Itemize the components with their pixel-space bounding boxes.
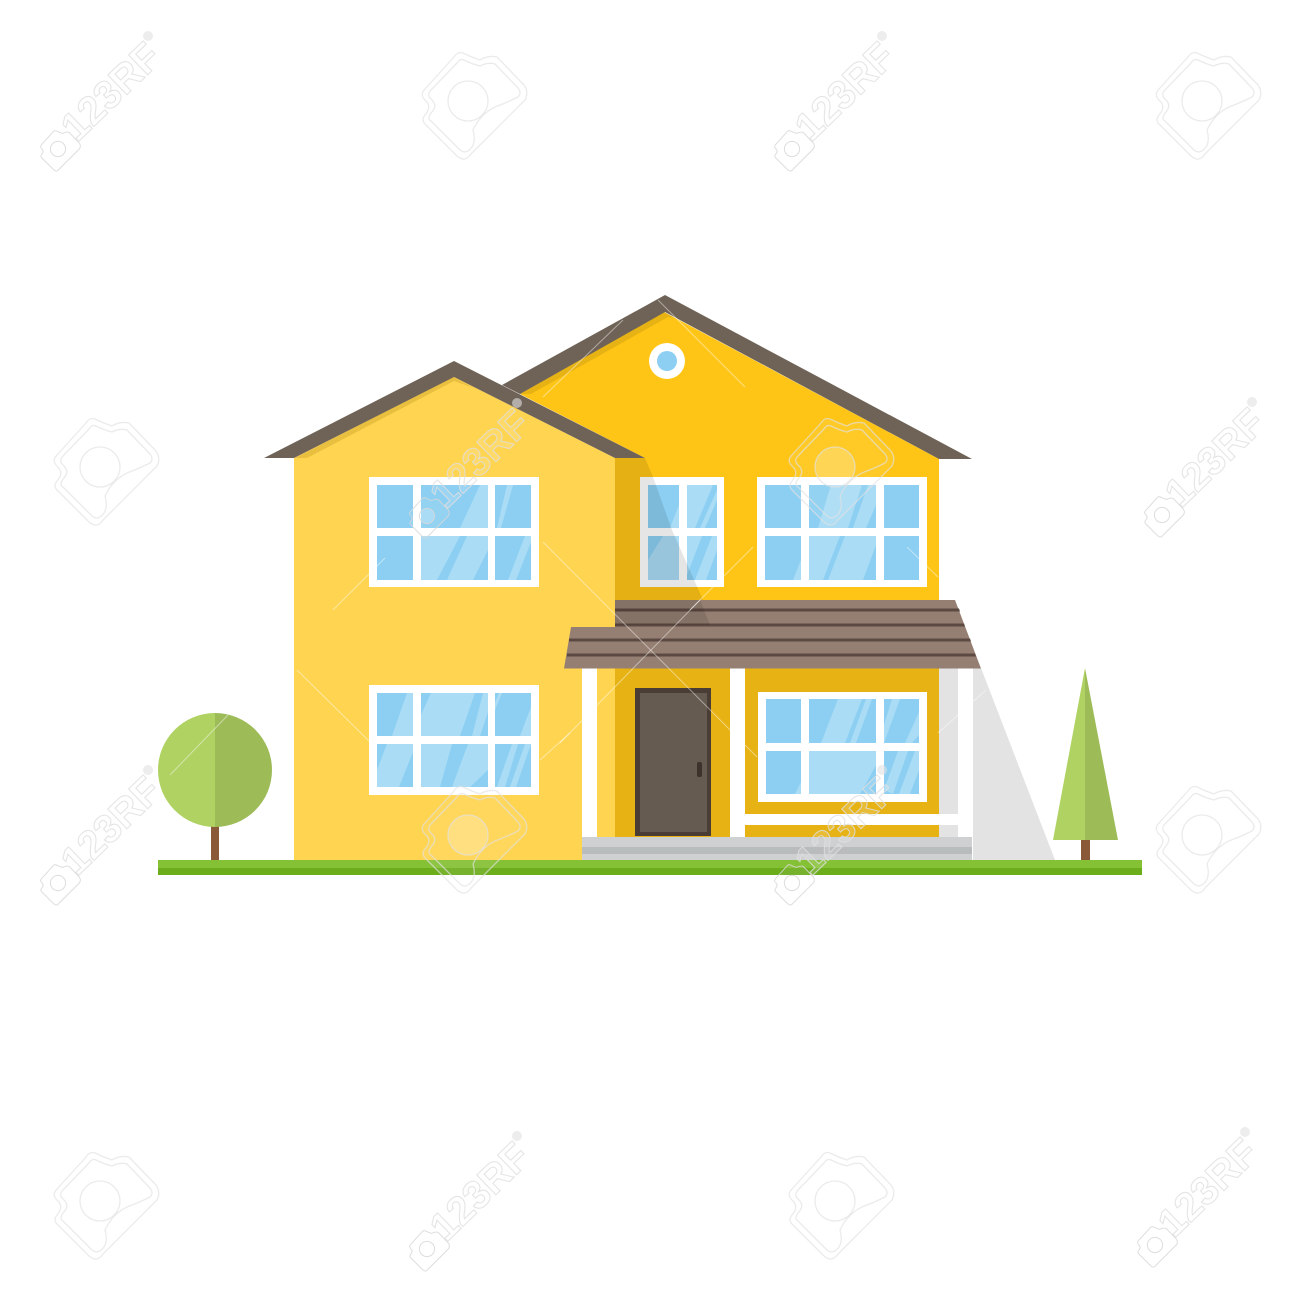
porch columns and railing [582,668,973,837]
ground shadow of the house [973,668,1055,860]
left gable roof [264,361,645,458]
watermark stamp 7: 123RF [422,1134,539,1249]
watermark stamp 5: 123RF [53,768,170,883]
windows [369,477,927,795]
glass reflections [377,485,919,794]
watermark stamp 2: 123RF [787,34,904,149]
watermark stamp 1: 123RF [53,34,170,149]
pine tree [1053,668,1118,861]
round tree [158,713,272,862]
watermark stamp 8: 123RF [1150,1130,1267,1245]
watermark hairlines [170,300,986,775]
door handle [697,762,702,777]
right gable roof [502,295,972,459]
right gable wall [520,312,939,601]
porch roof [564,600,981,668]
watermark stamp 6: 123RF [787,768,904,883]
window frames [369,477,927,795]
window glass [370,480,930,800]
porch steps [582,837,972,860]
left gable eave shade [295,377,474,458]
porch window frame [758,692,927,802]
ground strip [158,860,1142,875]
watermark stamp 3: 123RF [422,401,539,516]
door [635,688,711,836]
cast shadow from left gable [615,458,710,625]
right gable eave shade [520,312,674,394]
porch lower wall [615,668,958,837]
watermark stamp 4: 123RF [1157,400,1274,515]
roof shingle lines [567,608,976,656]
round attic window [649,343,685,379]
left gable wall [294,377,615,860]
